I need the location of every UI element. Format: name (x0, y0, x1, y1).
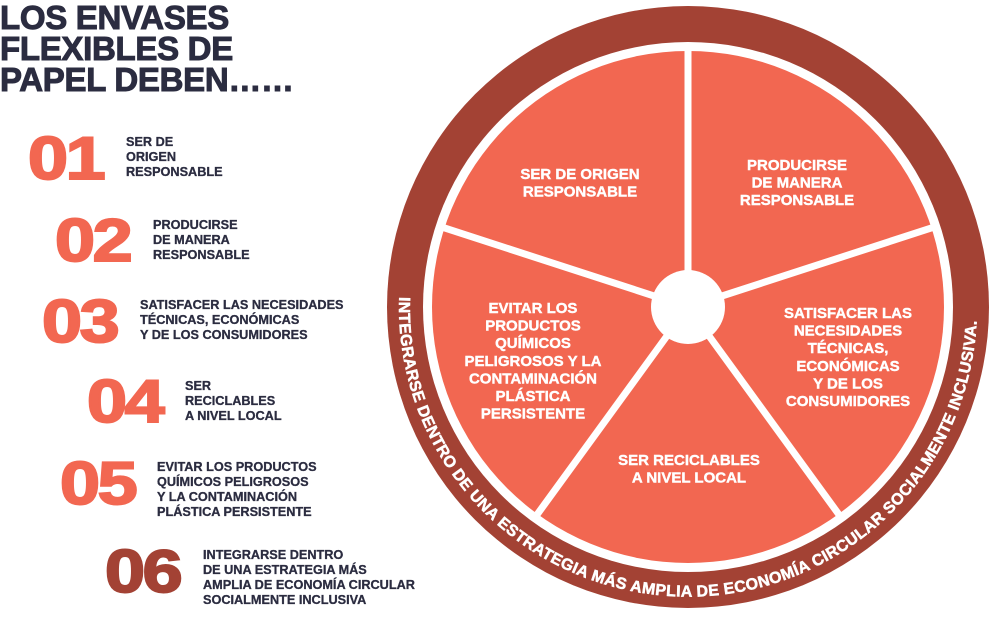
number 02: 02 (55, 207, 130, 274)
segment: satisfacer: SATISFACER LAS (784, 305, 912, 322)
label 03: SATISFACER LAS NECESIDADES (140, 298, 344, 312)
segment: reciclables: SER RECICLABLES (618, 452, 760, 469)
segment: satisfacer: CONSUMIDORES (786, 393, 910, 410)
segment: evitar: QUÍMICOS (495, 335, 571, 352)
label 06 (203, 548, 415, 607)
item 06 (105, 538, 415, 607)
label 01: RESPONSABLE (126, 165, 223, 179)
segment: satisfacer: TÉCNICAS, (808, 340, 888, 357)
label 05: EVITAR LOS PRODUCTOS (157, 460, 317, 474)
segment: evitar: PERSISTENTE (481, 406, 585, 423)
pie (432, 47, 944, 563)
label 01: SER DE (126, 135, 173, 149)
segment: reciclables: A NIVEL LOCAL (632, 470, 746, 487)
label 04: A NIVEL LOCAL (185, 409, 282, 423)
number 03: 03 (42, 288, 117, 355)
number 04: 04 (87, 368, 162, 435)
label 06: INTEGRARSE DENTRO (203, 548, 343, 562)
title: FLEXIBLES DE (0, 30, 233, 67)
label 01 (126, 135, 223, 179)
label 02: RESPONSABLE (153, 248, 250, 262)
number 05: 05 (60, 450, 135, 517)
label 05: PLÁSTICA PERSISTENTE (157, 505, 312, 519)
title: PAPEL DEBEN…… (0, 61, 294, 98)
segment: producirse: PRODUCIRSE (747, 157, 847, 174)
label 05: Y LA CONTAMINACIÓN (157, 490, 297, 504)
segment labels (465, 157, 912, 487)
label 04: SER (185, 379, 211, 393)
segment: evitar: EVITAR LOS (489, 300, 577, 317)
label 03: Y DE LOS CONSUMIDORES (140, 328, 308, 342)
segment: satisfacer: NECESIDADES (794, 323, 902, 340)
item 01 (28, 125, 223, 192)
item 04 (87, 368, 282, 435)
item 05 (60, 450, 317, 519)
segment: satisfacer: ECONÓMICAS (796, 357, 900, 375)
label 06: SOCIALMENTE INCLUSIVA (203, 593, 366, 607)
number 01: 01 (28, 125, 103, 192)
segment: producirse: RESPONSABLE (740, 192, 854, 209)
label 06: AMPLIA DE ECONOMÍA CIRCULAR (203, 578, 415, 592)
segment: origen: SER DE ORIGEN (520, 166, 640, 183)
item 03 (42, 288, 344, 355)
label 05 (157, 460, 317, 519)
label 04: RECICLABLES (185, 394, 275, 408)
item 02 (55, 207, 250, 274)
label 02: PRODUCIRSE (153, 218, 238, 232)
segment: evitar: PRODUCTOS (485, 318, 581, 335)
label 02 (153, 218, 250, 262)
segment: producirse: DE MANERA (752, 174, 843, 192)
segment: evitar: PELIGROSOS Y LA (465, 353, 602, 370)
segment: evitar: CONTAMINACIÓN (469, 369, 597, 387)
label 06: DE UNA ESTRATEGIA MÁS (203, 563, 367, 577)
outer ring (387, 6, 989, 608)
label 01: ORIGEN (126, 150, 176, 164)
segment: origen: RESPONSABLE (523, 184, 637, 200)
segment: satisfacer: Y DE LOS (813, 375, 883, 392)
number 06: 06 (105, 538, 180, 605)
label 04 (185, 379, 282, 423)
label 02: DE MANERA (153, 233, 230, 247)
label 03: TÉCNICAS, ECONÓMICAS (140, 313, 299, 327)
label 05: QUÍMICOS PELIGROSOS (157, 475, 309, 489)
segment: evitar: PLÁSTICA (496, 388, 571, 405)
ring text: INTEGRARSE DENTRO DE UNA ESTRATEGIA MÁS AMPLIA DE ECONOMÍA CIRCULAR SOCIALMENTE INCLUSIVA. (398, 298, 977, 597)
label 03 (140, 298, 344, 342)
title (0, 0, 294, 98)
title: LOS ENVASES (0, 0, 229, 36)
